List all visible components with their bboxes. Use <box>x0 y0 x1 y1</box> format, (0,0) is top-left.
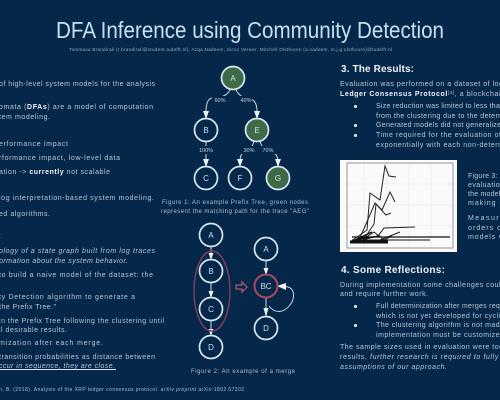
bullets <box>354 305 357 327</box>
self loop <box>269 287 294 312</box>
node D merged: D <box>263 324 269 333</box>
results text: [3] <box>448 90 454 95</box>
node BC: BC <box>260 282 272 291</box>
results text: Evaluation was performed on a dataset of log <box>340 81 500 88</box>
heading: some reflections: 4. Some Reflections: <box>341 265 445 276</box>
merge arrow <box>236 282 247 292</box>
chart: evaluation <box>340 160 457 252</box>
panel: introduction: rformance impact, low-level data <box>0 155 120 162</box>
figure 2 caption: Figure 2: An example of a merge <box>191 369 296 375</box>
edge labels: 60% <box>214 98 226 104</box>
reflections text <box>340 282 500 371</box>
panel: approach: ll desirable results. <box>0 327 67 334</box>
node A: A <box>208 231 214 240</box>
data lines <box>350 166 415 243</box>
panel: approach: the Prefix Tree." <box>0 304 56 311</box>
node C: C <box>208 305 214 314</box>
panel: introduction: ation -> currently not scalable <box>0 169 110 176</box>
node A merged: A <box>263 245 269 254</box>
panel: approach <box>0 233 164 370</box>
panel: approach: ty Detection algorithm to generate a <box>0 294 135 301</box>
arrowheads <box>208 253 268 336</box>
node E: E <box>254 126 260 135</box>
node B: B <box>208 267 214 276</box>
reference: h, B. (2018). Analysis of the XRP ledger consensus protocol. arXiv preprint arXiv:1802.07202 <box>0 387 244 393</box>
results text <box>340 81 500 149</box>
baseline data <box>350 232 450 242</box>
panel: approach: to build a naive model of the dataset: the <box>0 272 153 279</box>
panel: introduction: tem modeling. <box>0 114 50 121</box>
edge labels: 30% <box>243 148 255 154</box>
figure 2: merge example <box>194 224 294 358</box>
heading: the results: 3. The Results: <box>341 64 414 75</box>
panel: introduction: ed algorithms. <box>0 211 50 218</box>
authors: Tommaso Brandirali (t.brandirali@student.tudelft.nl), Azqa Nadeem, Sicco Verwer, Mitchell Olsthoorn (a.nadeem, m.j.g.olsthoorn)@tudelft.nl <box>69 47 392 52</box>
node F: F <box>238 174 243 183</box>
figure 1 caption: Figure 1: An example Prefix Tree, green nodes <box>162 200 308 206</box>
reflections text: and require further work. <box>340 291 428 298</box>
divider line under approach <box>0 369 116 370</box>
edge labels: 40% <box>240 98 252 104</box>
reflections text: assumptions of our approach. <box>340 364 447 371</box>
panel: approach: in the Prefix Tree following the clustering until <box>0 318 164 325</box>
node G: G <box>275 174 281 183</box>
node C: C <box>203 174 209 183</box>
grid <box>347 163 453 248</box>
panel: introduction: omata (DFAs) are a model of computation <box>0 104 153 111</box>
edge labels: 100% <box>199 148 213 154</box>
bullets <box>354 105 357 137</box>
self loop arrowhead <box>277 283 286 290</box>
panel: approach: ccur in sequence, they are close. <box>0 363 115 370</box>
node D: D <box>208 343 214 352</box>
figure 1: prefix tree <box>194 66 290 190</box>
panel: introduction: erformance impact <box>0 141 68 148</box>
panel: approach: ormation about the system behavior. <box>0 258 128 265</box>
edge labels: 70% <box>262 148 274 154</box>
figure 1 caption line 2: represent the matching path for the trace "AEG" <box>161 209 309 215</box>
edge labels <box>198 96 277 154</box>
results text: Generated models did not generalize <box>376 122 500 129</box>
title: DFA Inference using Community Detection <box>56 17 444 43</box>
node B: B <box>203 126 209 135</box>
arrowheads <box>203 111 281 167</box>
figure 3 caption <box>468 173 500 241</box>
cluster ellipse <box>194 251 230 331</box>
panel: approach: ology of a state graph built from log traces <box>0 248 156 255</box>
results text: Ledger Consensus Protocol <box>340 91 447 98</box>
node A: A <box>230 74 236 83</box>
panel: approach: transition probabilities as distance between <box>0 354 155 361</box>
panel: introduction: of high-level system models for the analysis <box>0 81 156 88</box>
panel: introduction: log interpretation-based system modeling. <box>0 195 154 202</box>
panel: introduction <box>0 81 156 218</box>
panel: approach: mization after each merge. <box>0 340 103 347</box>
results text: Time required for the evaluation of <box>376 132 500 139</box>
reflections text: The sample sizes used in evaluation were too <box>340 344 500 351</box>
